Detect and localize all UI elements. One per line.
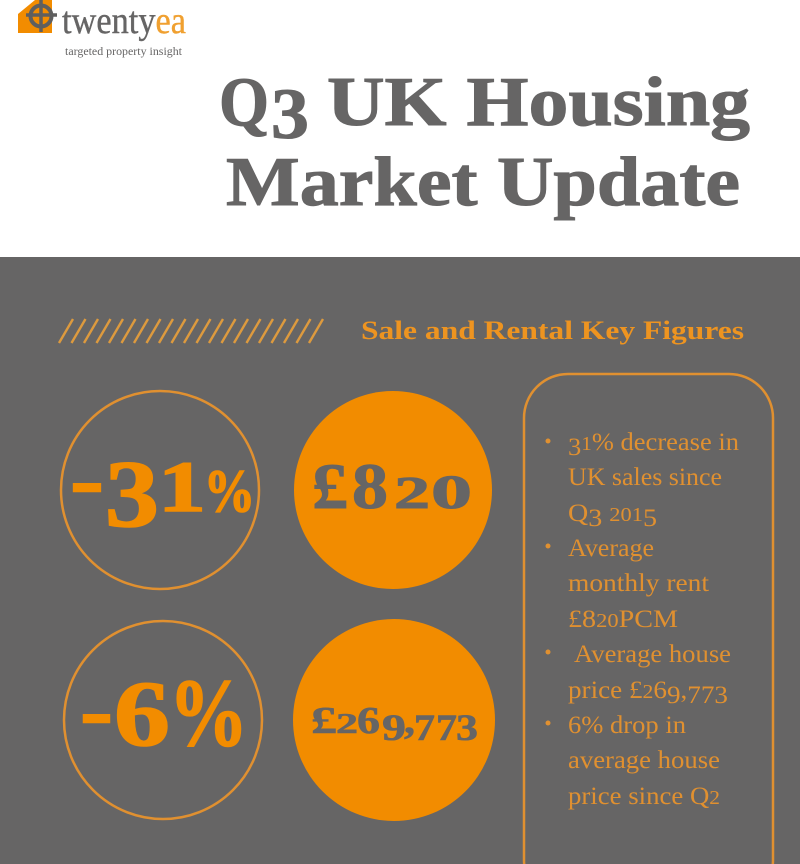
stat: -31% outlined circle: 1 [158, 447, 206, 527]
stat: -6% outlined circle: 6 [114, 663, 170, 766]
panel: key figures list [524, 374, 773, 864]
stat: £269,773 filled circle: 7 [414, 708, 435, 749]
bullet list text [546, 429, 740, 810]
stat: -6% outlined circle: - [80, 661, 113, 760]
logo wordmark: twentyea [62, 0, 186, 42]
bullet list text: £820PCM [568, 606, 678, 633]
bullet list text: average house [568, 747, 720, 774]
stat: -31% outlined circle: 3 [105, 441, 159, 547]
bullet list text: 773 [687, 682, 728, 709]
bullet list text: monthly rent [568, 570, 709, 597]
stat: -31% outlined circle [61, 391, 259, 589]
panel: white header [0, 0, 800, 257]
title: Market Update [226, 144, 740, 221]
stat: -6% outlined circle: % [169, 659, 248, 766]
bullet list text: , [681, 677, 687, 704]
stat: £820 filled circle: £ [312, 451, 348, 523]
stat: £820 filled circle: 8 [352, 451, 388, 523]
bullet list text: price £ 26 [568, 677, 666, 704]
stat: £269,773 filled circle [293, 619, 495, 821]
title: 3 [271, 74, 309, 154]
stat: £269,773 filled circle: 9 [382, 708, 406, 749]
bullet list text: price since Q 2 [568, 783, 720, 810]
stat: -31% outlined circle: - [70, 430, 104, 529]
title: UK Housing [327, 64, 750, 141]
logo tagline: targeted property insight [65, 46, 183, 58]
icon: house with crosshair [18, 0, 57, 33]
stat: £820 filled circle: 0 [431, 466, 472, 519]
decorative hatch stripes [59, 319, 323, 343]
bullet list text: 9 [667, 682, 681, 709]
logo [18, 0, 186, 58]
bullet list text: 201 [609, 504, 643, 526]
stat: £820 filled circle [294, 391, 492, 589]
stat: £269,773 filled circle: 2 [336, 708, 358, 740]
stat: £269,773 filled circle: 3 [456, 708, 478, 749]
stat: £820 filled circle: 2 [394, 467, 430, 518]
stat: £269,773 filled circle: 7 [436, 708, 457, 749]
bullet list text: UK sales since [568, 464, 722, 491]
panel: grey body [0, 257, 800, 864]
bullet list text: Average house [574, 641, 731, 668]
bullet list text: % decrease in [592, 429, 731, 456]
bullet list text: Q [568, 500, 586, 527]
bullet list text: 1 [581, 433, 592, 455]
stat: £269,773 filled circle: , [404, 700, 415, 742]
stat: £269,773 filled circle: £ [311, 700, 337, 742]
stat: £269,773 filled circle: 6 [357, 700, 380, 742]
stat: -6% outlined circle [64, 621, 262, 819]
bullet list text: 3 [588, 505, 602, 532]
bullet list text: 3 [568, 434, 581, 461]
title: Q [219, 64, 269, 141]
bullet list text: 5 [643, 505, 657, 532]
section heading: Sale and Rental Key Figures [361, 316, 744, 345]
bullet list text: Average [568, 535, 654, 562]
bullet list text: 6% drop in [568, 712, 687, 739]
stat: -31% outlined circle: % [204, 458, 255, 524]
title [219, 64, 750, 221]
